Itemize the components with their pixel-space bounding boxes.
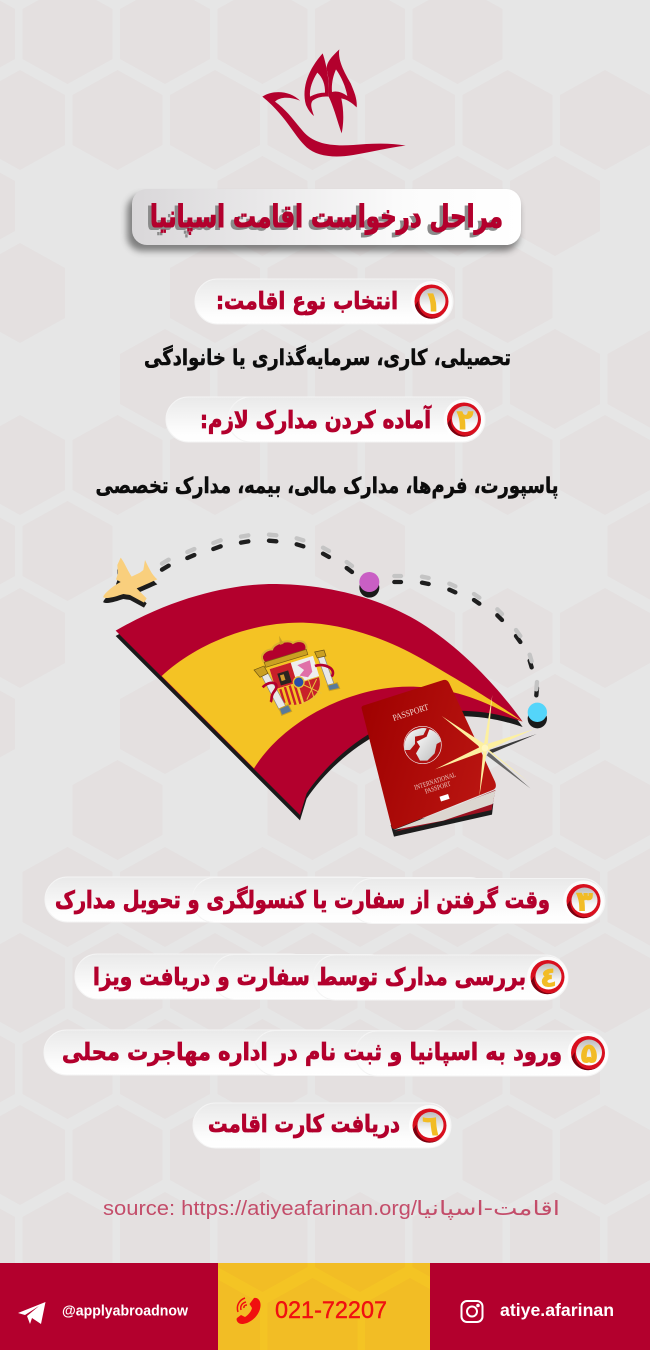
passport chip icon [439, 794, 450, 802]
waypoint dot pink [359, 572, 379, 598]
passport title: PASSPORT [391, 702, 430, 723]
title banner [127, 189, 521, 251]
step 2 pill [166, 397, 485, 442]
title banner: مراحل درخواست اقامت اسپانیا [146, 202, 500, 238]
step 5 badge [568, 1032, 608, 1074]
step 3 text: وقت گرفتن از سفارت یا کنسولگری و تحویل مدارک [55, 886, 550, 914]
flag of Spain [116, 584, 523, 820]
instagram handle: atiye.afarinan [500, 1300, 614, 1320]
passport globe [404, 726, 441, 764]
step 1 badge: ۱ [424, 287, 441, 318]
telegram handle: @applyabroadnow [62, 1304, 189, 1320]
sparkle [435, 695, 537, 797]
step 1 badge [411, 281, 452, 322]
step 6 pill [193, 1103, 451, 1148]
shield [270, 656, 325, 710]
icon: phone [237, 1298, 261, 1324]
step 2 heading: آماده کردن مدارک لازم: [200, 405, 432, 434]
icon: telegram [18, 1302, 46, 1324]
step 4 pill [75, 954, 568, 1000]
source line [103, 1196, 560, 1221]
step 6 badge [409, 1105, 450, 1146]
crown [257, 629, 309, 668]
illustration: flight over Spanish flag with passport [103, 535, 547, 837]
source line: source: https://atiyeafarinan.org/ [103, 1198, 417, 1220]
source line: اقامت-اسپانیا [416, 1196, 560, 1221]
step 2 detail: پاسپورت، فرم‌ها، مدارک مالی، بیمه، مدارک تخصصی [96, 474, 558, 499]
title banner: مراحل درخواست اقامت اسپانیا [150, 199, 503, 235]
phone number: 021-72207 [275, 1297, 387, 1324]
step 2 badge [444, 399, 484, 440]
logo [262, 49, 406, 156]
step 4 badge: ٤ [540, 962, 557, 994]
icon: airplane [103, 558, 157, 608]
coat of arms [254, 629, 340, 715]
step 6 text: دریافت کارت اقامت [208, 1110, 400, 1138]
pillars [254, 650, 340, 715]
footer: telegram [0, 1263, 218, 1350]
step 5 text: ورود به اسپانیا و ثبت نام در اداره مهاجرت محلی [62, 1038, 562, 1066]
step 6 badge: ٦ [422, 1111, 439, 1142]
passport subtitle: PASSPORT [424, 780, 452, 796]
step 3 badge [563, 880, 604, 922]
step 3 badge: ۳ [576, 886, 593, 918]
step 1 heading: انتخاب نوع اقامت: [216, 287, 398, 315]
step 1 pill [195, 279, 453, 324]
passport subtitle: INTERNATIONAL [413, 771, 457, 792]
waypoint dot blue [528, 703, 547, 728]
flight path dashes [162, 535, 537, 695]
step 4 badge [527, 956, 568, 998]
step 1 detail: تحصیلی، کاری، سرمایه‌گذاری یا خانوادگی [144, 344, 511, 371]
step 4 text: بررسی مدارک توسط سفارت و دریافت ویزا [93, 963, 526, 991]
passport subtitle [413, 771, 457, 796]
footer: instagram [430, 1263, 650, 1350]
icon: instagram [462, 1301, 482, 1322]
step 3 pill [45, 877, 605, 924]
step 2 badge: ۲ [457, 405, 474, 436]
passport [362, 680, 496, 837]
footer: phone [218, 1263, 430, 1350]
step 5 badge: ۵ [581, 1038, 597, 1070]
step 5 pill [44, 1030, 608, 1076]
